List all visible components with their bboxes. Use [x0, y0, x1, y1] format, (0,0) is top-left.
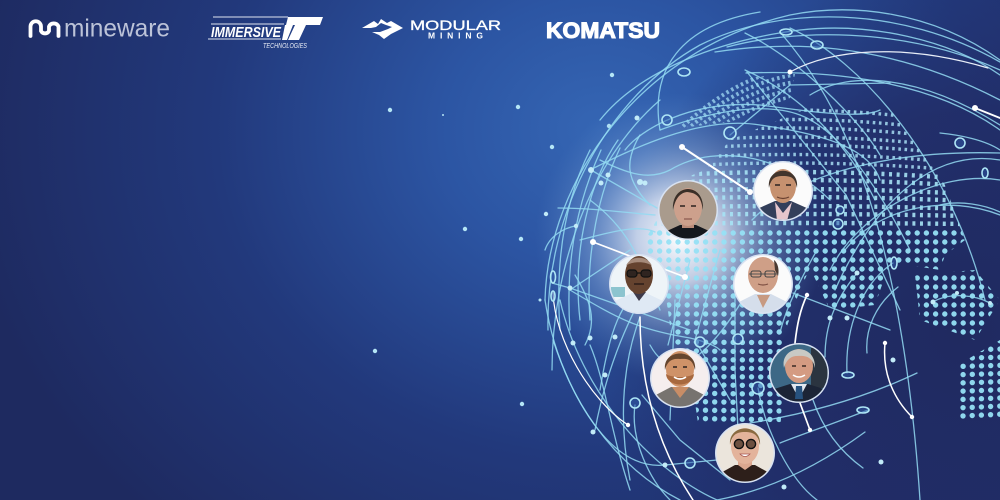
portrait 4 — [733, 254, 793, 314]
logo: Komatsu: KOMATSU — [546, 18, 660, 43]
Immersive outline bar — [208, 17, 288, 39]
portrait 2 — [753, 161, 813, 221]
Mining wordmark: MINING — [428, 30, 483, 40]
mineware wordmark: mineware — [64, 14, 170, 42]
globe glow — [535, 93, 825, 383]
portrait 6 — [769, 343, 829, 403]
portrait 1 — [658, 180, 718, 240]
scattered particle dots — [373, 73, 614, 406]
globe dotted world map — [648, 108, 1000, 422]
globe outer meridian and parallel lines — [545, 10, 1000, 500]
bright white connector lines — [553, 52, 1000, 500]
icon: mineware loops — [30, 21, 58, 36]
icon: Modular mountain — [362, 19, 403, 39]
portrait 3 — [609, 254, 669, 314]
logo: Immersive Technologies — [208, 17, 323, 50]
Technologies wordmark: TECHNOLOGIES — [263, 41, 307, 50]
portrait 5 — [650, 348, 710, 408]
portrait 7 — [715, 423, 775, 483]
logo: Modular Mining — [362, 17, 501, 40]
network node rings — [550, 29, 988, 468]
network node dots — [544, 70, 992, 490]
Immersive wordmark: IMMERSIVE — [211, 24, 282, 41]
Immersive T mark — [282, 17, 323, 40]
left meridian arcs — [559, 150, 590, 330]
logo: mineware — [30, 14, 170, 42]
upper dotted land band — [680, 74, 795, 128]
Modular wordmark: MODULAR — [410, 17, 501, 33]
